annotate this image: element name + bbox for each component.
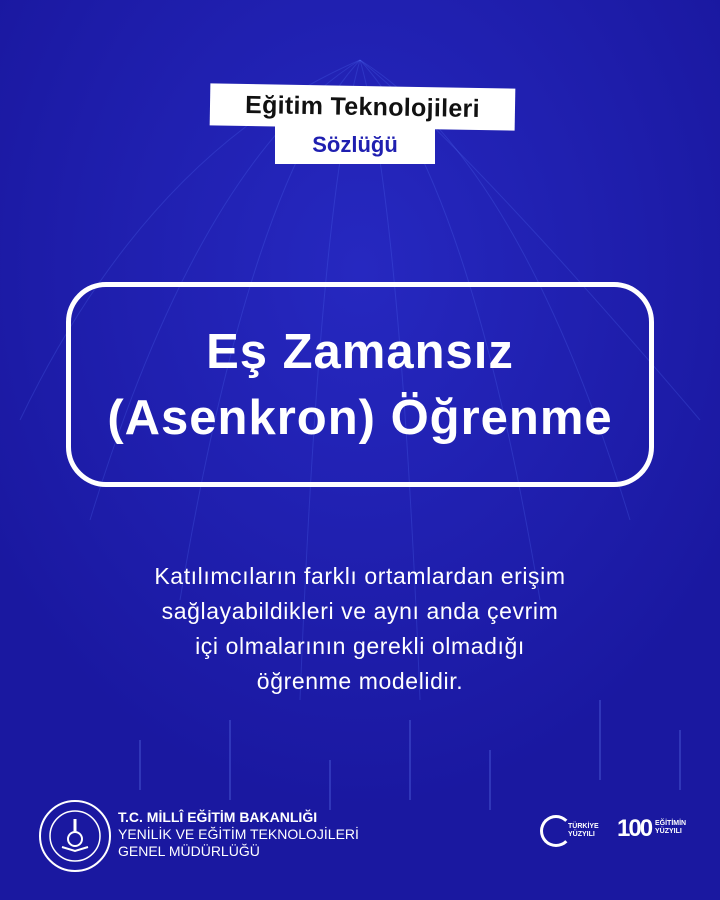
- title box: [66, 282, 654, 487]
- description text: sağlayabildikleri ve aynı anda çevrim: [162, 598, 558, 624]
- tag: Eğitim Teknolojileri: [210, 83, 515, 131]
- title box: Eş Zamansız: [206, 324, 514, 378]
- tag: Eğitim Teknolojileri: Eğitim Teknolojileri: [245, 90, 480, 123]
- description text: içi olmalarının gerekli olmadığı: [195, 633, 525, 659]
- logo: Türkiye Yüzyılı: [540, 815, 599, 847]
- logo: 100 Eğitimin Yüzyılı: YÜZYILI: [655, 828, 682, 835]
- tag: Sözlüğü: Sözlüğü: [312, 132, 398, 157]
- description text: [154, 563, 566, 694]
- logo: 100 Eğitimin Yüzyılı: EĞİTİMİN: [655, 820, 686, 827]
- title box: (Asenkron) Öğrenme: [107, 390, 613, 444]
- footer ministry text: [118, 809, 359, 859]
- footer ministry text: T.C. MİLLÎ EĞİTİM BAKANLIĞI: [118, 809, 317, 825]
- icon: ministry logo: [39, 800, 111, 872]
- footer ministry text: YENİLİK VE EĞİTİM TEKNOLOJİLERİ: [118, 826, 359, 842]
- logo: 100 Eğitimin Yüzyılı: [617, 815, 686, 842]
- description text: öğrenme modelidir.: [257, 668, 463, 694]
- logo: 100 Eğitimin Yüzyılı: 100: [617, 815, 651, 842]
- footer ministry text: GENEL MÜDÜRLÜĞÜ: [118, 843, 260, 859]
- description text: Katılımcıların farklı ortamlardan erişim: [154, 563, 566, 589]
- logo: Türkiye Yüzyılı: TÜRKİYE: [568, 823, 599, 830]
- tag: Sözlüğü: [275, 126, 435, 164]
- logo: Türkiye Yüzyılı: YÜZYILI: [568, 831, 595, 838]
